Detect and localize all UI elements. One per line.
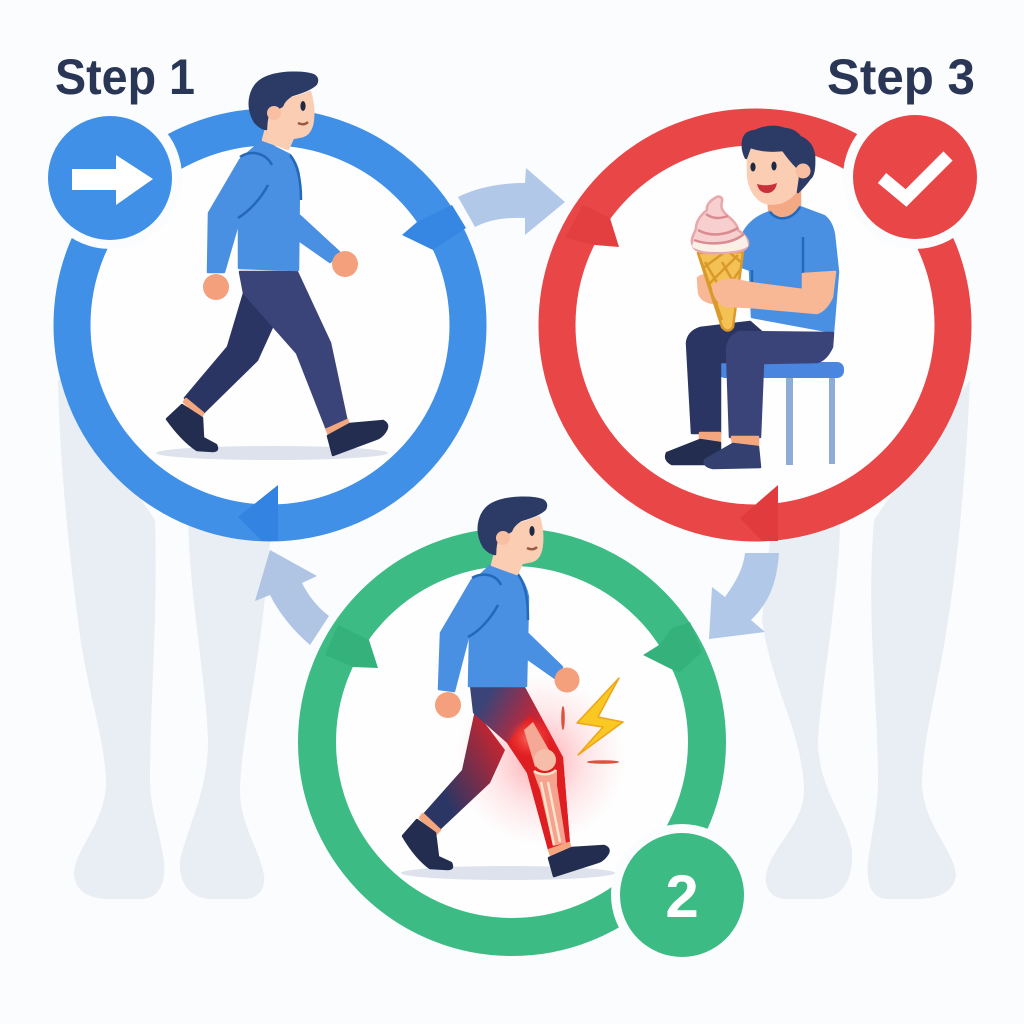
ring arrowhead: bottom bbox=[740, 485, 778, 541]
panel: step 2 green ring bbox=[317, 547, 707, 937]
figure: walking man with knee pain bbox=[401, 498, 625, 880]
ring arrowhead: bottom bbox=[238, 485, 278, 541]
flow arrow: step 1 to step 3 bbox=[458, 168, 565, 235]
flow arrow: step 2 to step 1 bbox=[255, 550, 329, 645]
icon: ice cream cone bbox=[692, 197, 748, 330]
icon: white check mark bbox=[882, 156, 948, 198]
stool bbox=[718, 362, 844, 465]
ring arrowhead: right bbox=[643, 622, 702, 672]
pain glow bbox=[455, 675, 625, 845]
number 2: 2 bbox=[665, 863, 699, 930]
back hand bbox=[698, 275, 714, 303]
panel: step 3 red ring bbox=[557, 127, 953, 541]
head bbox=[479, 498, 546, 574]
badge: step 3 check bbox=[843, 105, 987, 249]
badge: step 2 number bbox=[611, 824, 753, 966]
badge: step 1 arrow bbox=[38, 105, 182, 249]
ring arrowhead: left bbox=[325, 625, 378, 668]
background silhouette: left legs bbox=[58, 380, 270, 899]
ring arrowhead: upper right bbox=[402, 205, 466, 250]
heading: Step 1: Step 1 bbox=[55, 49, 195, 105]
head bbox=[743, 127, 814, 204]
figure: seated man with ice cream bbox=[666, 127, 844, 468]
heading: Step 3: Step 3 bbox=[827, 49, 975, 105]
ring arrowhead: upper left bbox=[565, 205, 619, 247]
icon: lightning bolt bbox=[577, 678, 623, 755]
background silhouette: right legs bbox=[762, 380, 970, 899]
panel: step 1 blue ring bbox=[72, 127, 468, 541]
flow arrow: step 3 to step 2 bbox=[709, 553, 779, 639]
head bbox=[250, 73, 317, 149]
icon: white right arrow bbox=[72, 155, 153, 205]
figure: walking man bbox=[156, 73, 388, 460]
arm and front hand bbox=[713, 272, 835, 313]
pain tick marks bbox=[561, 706, 619, 764]
knee bones bbox=[508, 718, 566, 846]
